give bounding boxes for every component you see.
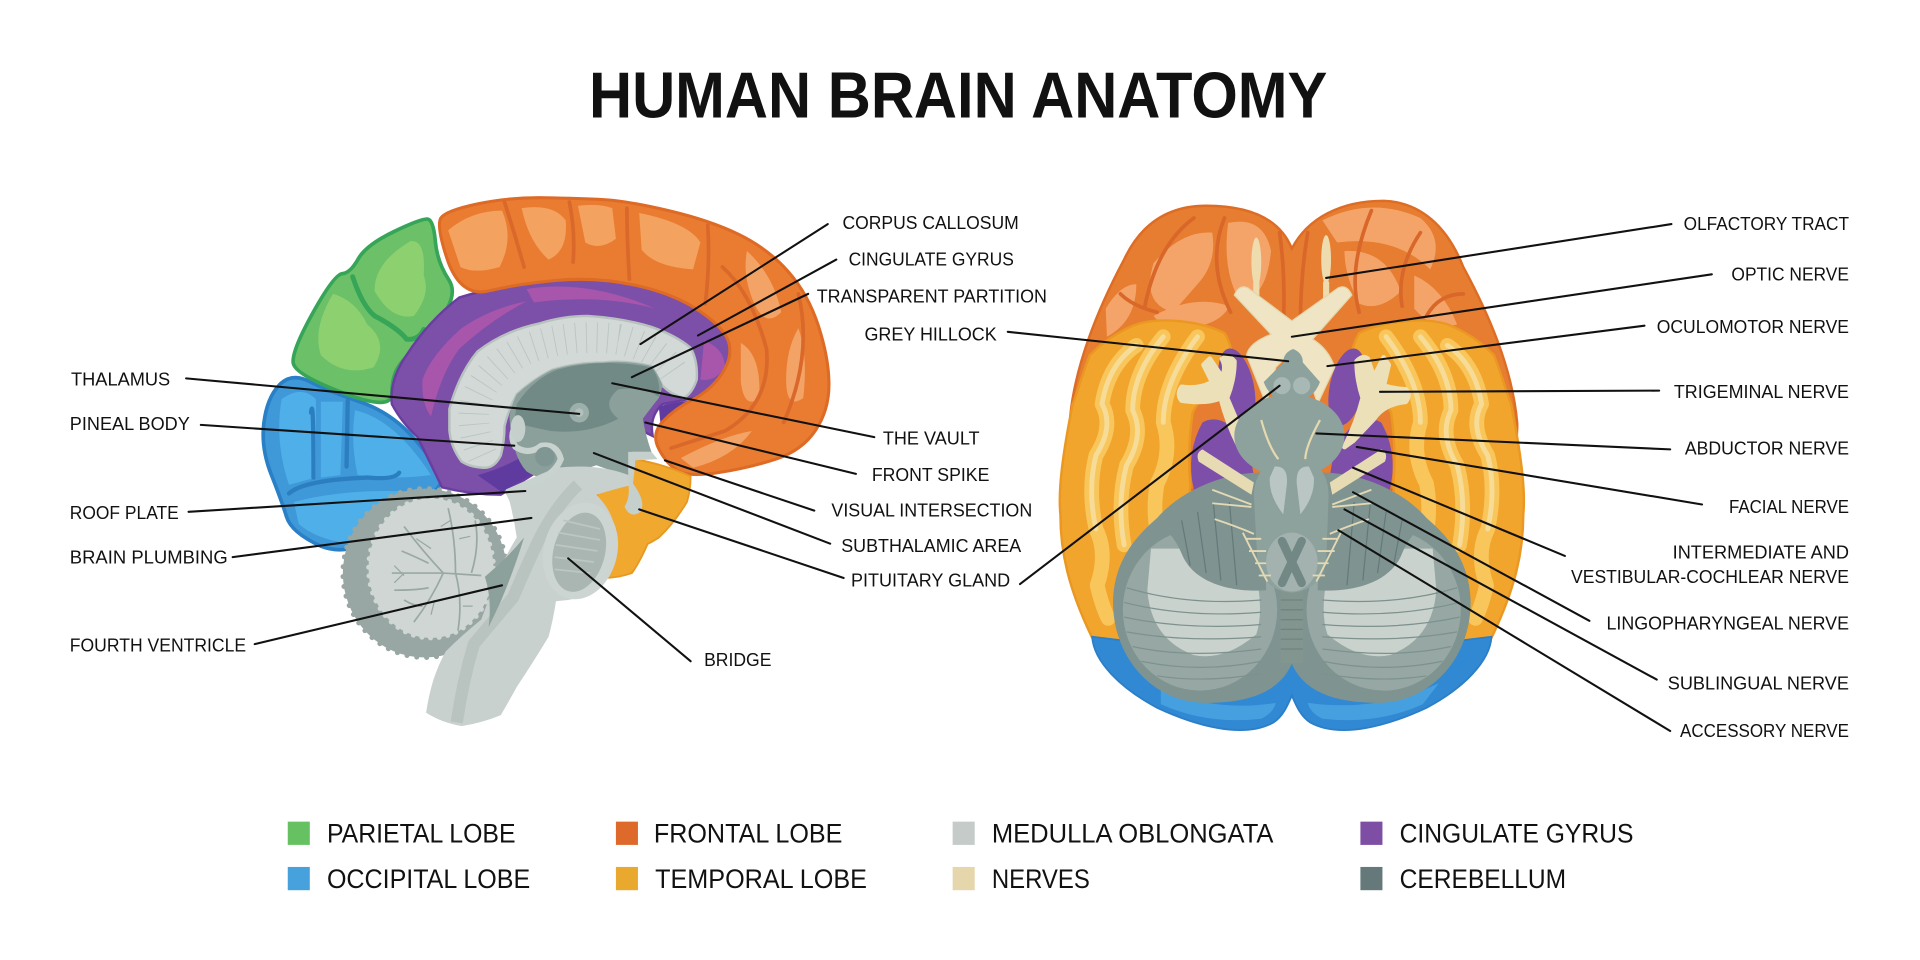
legend: nerves [953, 864, 1090, 894]
bridge (pons) [532, 494, 629, 608]
optic nerves and chiasm [1234, 287, 1352, 404]
frontal lobe [439, 198, 829, 475]
cerebellum inferior [1113, 471, 1471, 703]
labels: sagittal right: BRIDGE [704, 649, 771, 670]
labels: nerves: OCULOMOTOR NERVE [1657, 316, 1849, 337]
temporal lobe inferior [1060, 321, 1232, 655]
labels: sagittal left: PINEAL BODY [70, 413, 190, 434]
pons [1234, 394, 1344, 478]
labels: nerves: FACIAL NERVE [1729, 496, 1849, 517]
cerebellum [343, 489, 507, 658]
labels: sagittal left [70, 369, 246, 655]
abducens nerves on pons [1261, 420, 1320, 459]
pineal tube [507, 422, 561, 492]
cingulate gyrus [392, 278, 732, 495]
temporal lobe [596, 459, 691, 578]
facial nerve bundles [1198, 449, 1386, 495]
labels: nerves: SUBLINGUAL NERVE [1668, 672, 1849, 693]
thalamus region [509, 362, 662, 479]
occipital lobe [263, 378, 441, 550]
labels: sagittal right: SUBTHALAMIC AREA [841, 535, 1022, 556]
medulla oblongata [1254, 460, 1329, 593]
superior colliculus [535, 447, 555, 467]
legend: cingulate gyrus: CINGULATE GYRUS [1400, 818, 1633, 848]
labels: nerves: INTERMEDIATE AND [1673, 541, 1849, 562]
legend: frontal lobe: FRONTAL LOBE [654, 818, 842, 848]
labels: nerves: TRIGEMINAL NERVE [1674, 381, 1849, 402]
legend: occipital lobe: OCCIPITAL LOBE [327, 864, 530, 894]
title: HUMAN BRAIN ANATOMY [589, 59, 1327, 132]
labels: sagittal right: VISUAL INTERSECTION [831, 500, 1032, 521]
labels: sagittal right: CORPUS CALLOSUM [842, 212, 1019, 233]
cranial nerve fibres [1212, 490, 1371, 582]
legend: temporal lobe: TEMPORAL LOBE [655, 864, 867, 894]
labels: sagittal right: THE VAULT [883, 427, 980, 448]
labels: sagittal right: GREY HILLOCK [864, 323, 997, 344]
parietal lobe [293, 219, 452, 402]
labels: nerves [1571, 213, 1849, 741]
legend: cerebellum: CEREBELLUM [1400, 864, 1566, 894]
trigeminal nerves [1179, 357, 1408, 447]
labels: sagittal left: BRAIN PLUMBING [70, 546, 228, 567]
leader lines [186, 224, 1712, 731]
legend: medulla oblongata: MEDULLA OBLONGATA [992, 818, 1274, 848]
purple cingulate areas [1191, 345, 1393, 490]
sagittal brain illustration [263, 198, 829, 726]
labels: nerves: ACCESSORY NERVE [1680, 720, 1849, 741]
brain stem [426, 466, 632, 726]
labels: nerves: VESTIBULAR-COCHLEAR NERVE [1571, 566, 1849, 587]
labels: sagittal right: CINGULATE GYRUS [849, 249, 1014, 270]
labels: sagittal left: THALAMUS [71, 369, 170, 390]
labels: sagittal right [704, 212, 1047, 670]
pituitary gland [624, 452, 658, 515]
labels: sagittal right: PITUITARY GLAND [851, 570, 1010, 591]
labels: nerves: OLFACTORY TRACT [1684, 213, 1849, 234]
frontal lobe inferior [1070, 201, 1517, 490]
occipital lobe inferior [1092, 637, 1491, 730]
pineal body [511, 415, 525, 442]
labels: sagittal right: FRONT SPIKE [872, 464, 989, 485]
temporal lobe inferior mirrored [1352, 321, 1524, 655]
corpus callosum [449, 316, 697, 468]
legend [288, 818, 1633, 894]
labels: sagittal right: TRANSPARENT PARTITION [817, 285, 1047, 306]
legend: nerves: NERVES [992, 864, 1090, 894]
labels: nerves: OPTIC NERVE [1731, 263, 1849, 284]
legend: parietal lobe: PARIETAL LOBE [327, 818, 516, 848]
labels: nerves: ABDUCTOR NERVE [1685, 437, 1849, 458]
labels: nerves: LINGOPHARYNGEAL NERVE [1607, 612, 1849, 633]
grey hillock [1264, 349, 1320, 402]
inferior brain illustration [1060, 201, 1524, 730]
labels: sagittal left: ROOF PLATE [70, 502, 179, 523]
labels: sagittal left: FOURTH VENTRICLE [70, 634, 246, 655]
